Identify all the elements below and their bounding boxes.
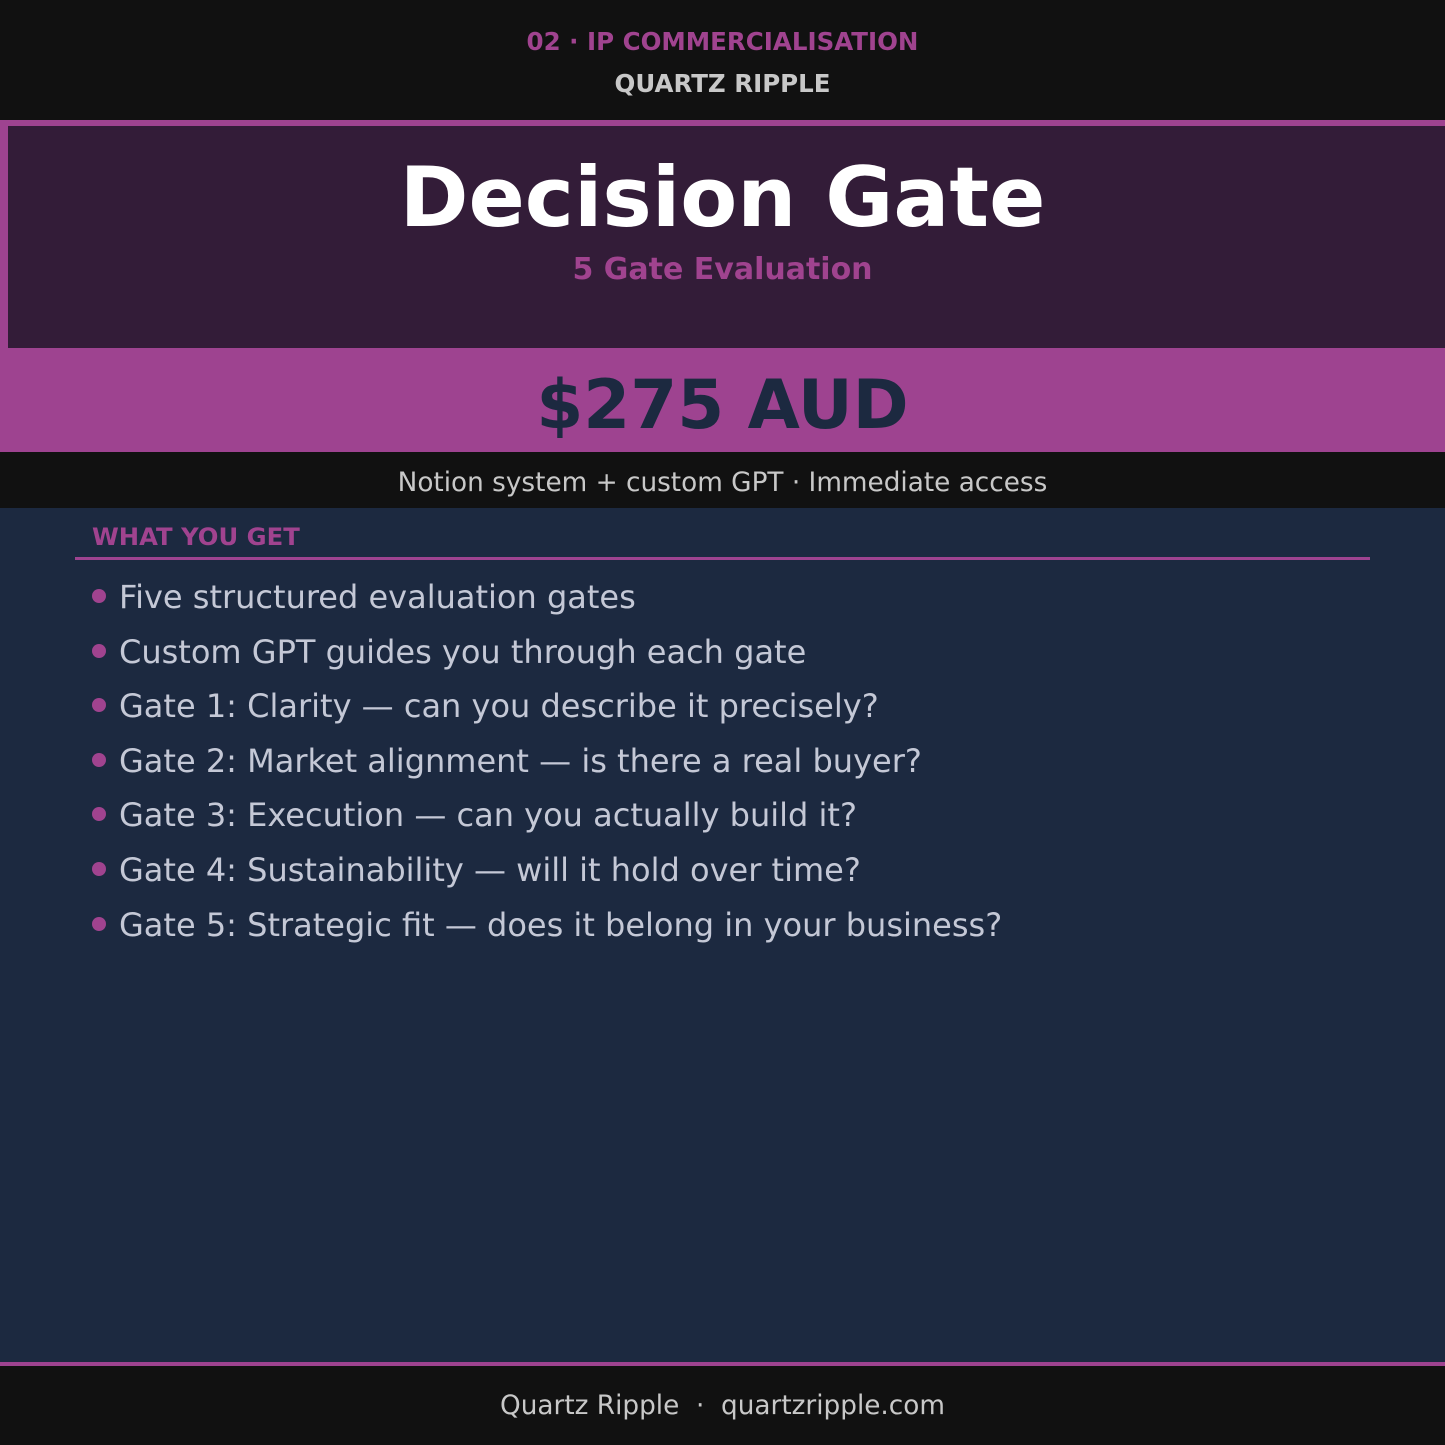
header bar (0, 0, 1445, 120)
feature list (92, 578, 1002, 944)
section heading: WHAT YOU GET (92, 522, 300, 551)
price: $275 AUD (536, 365, 909, 444)
section: what you get (75, 522, 1370, 944)
feature list: Gate 5: Strategic fit — does it belong in your business? (119, 906, 1002, 944)
feature list: Gate 3: Execution — can you actually build it? (119, 796, 857, 834)
feature list: Gate 1: Clarity — can you describe it precisely? (119, 687, 879, 725)
feature list: Gate 2: Market alignment — is there a real buyer? (119, 742, 922, 780)
footer (0, 1362, 1445, 1445)
price band (0, 348, 1445, 452)
feature list: Gate 4: Sustainability — will it hold over time? (119, 851, 861, 889)
delivery note (0, 452, 1445, 508)
feature list: Custom GPT guides you through each gate (119, 633, 806, 671)
subtitle: 5 Gate Evaluation (572, 252, 873, 287)
delivery note: Notion system + custom GPT · Immediate access (398, 468, 1047, 498)
brand name: QUARTZ RIPPLE (615, 69, 830, 98)
series label: 02 · IP COMMERCIALISATION (527, 27, 918, 56)
title: Decision Gate (400, 149, 1045, 246)
title panel (0, 120, 1445, 348)
footer: Quartz Ripple · quartzripple.com (500, 1391, 945, 1421)
feature list: Five structured evaluation gates (119, 578, 636, 616)
